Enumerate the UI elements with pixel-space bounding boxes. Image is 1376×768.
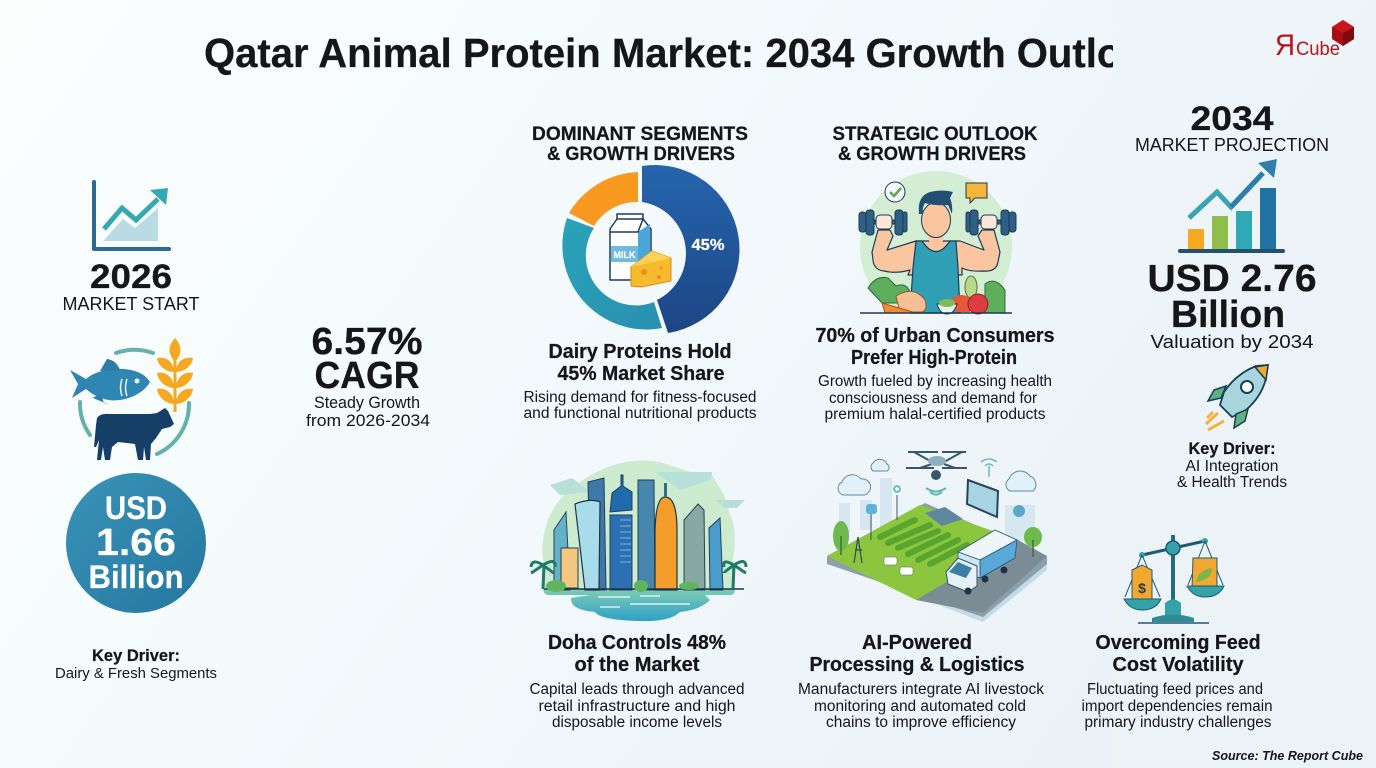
text block: urban consumers: premium halal-certified products xyxy=(824,406,1046,423)
panel: 2034 market projection xyxy=(1135,100,1329,491)
panel: 2026 market start xyxy=(55,182,217,682)
stat: USD 2.76 Billion: Valuation by 2034 xyxy=(1150,331,1314,352)
icon: rising bars xyxy=(1178,159,1285,253)
text block: urban consumers: consciousness and demand for xyxy=(829,390,1037,407)
heading: strategic outlook: & GROWTH DRIVERS xyxy=(838,144,1026,165)
text block: feed cost xyxy=(1082,632,1272,731)
text block: feed cost: primary industry challenges xyxy=(1084,714,1272,731)
panel: CAGR: 6.57% xyxy=(312,321,422,363)
icon: milk carton and cheese: MILK xyxy=(614,250,636,260)
text block: AI processing: chains to improve efficiency xyxy=(826,714,1016,731)
source note: Source: The Report Cube xyxy=(1212,749,1363,763)
text block: AI processing: AI-Powered xyxy=(862,632,972,654)
key driver: AI and health xyxy=(1177,440,1287,491)
year 2034: 2034 xyxy=(1190,100,1274,138)
text block: AI processing xyxy=(798,632,1044,731)
key driver: dairy and fresh xyxy=(55,647,217,682)
text block: dairy proteins: and functional nutritional products xyxy=(524,405,757,422)
text block: Doha xyxy=(530,632,744,731)
logo: RCube: Cube xyxy=(1296,39,1340,60)
stat: USD 2.76 Billion xyxy=(1148,258,1316,352)
text block: dairy proteins: 45% Market Share xyxy=(558,363,724,385)
heading: strategic outlook xyxy=(832,124,1038,165)
heading: dominant segments xyxy=(532,124,748,165)
text block: Doha: disposable income levels xyxy=(552,714,722,731)
text block: urban consumers: Prefer High-Protein xyxy=(851,347,1017,369)
heading: dominant segments: & GROWTH DRIVERS xyxy=(547,144,735,165)
logo: RCube xyxy=(1275,20,1354,62)
text block: Doha: of the Market xyxy=(574,654,700,676)
text block: urban consumers: 70% of Urban Consumers xyxy=(816,325,1054,347)
key driver: dairy and fresh: Key Driver: xyxy=(92,647,180,665)
stat circle: USD 1.66 Billion xyxy=(66,473,206,613)
heading: strategic outlook: STRATEGIC OUTLOOK xyxy=(832,124,1038,145)
text block: feed cost: Fluctuating feed prices and xyxy=(1087,681,1263,698)
stat: USD 2.76 Billion: Billion xyxy=(1171,294,1285,336)
text block: urban consumers xyxy=(816,325,1054,423)
panel: CAGR: CAGR xyxy=(314,355,420,397)
icon: balance scale: $ xyxy=(1138,580,1146,596)
key driver: AI and health: Key Driver: xyxy=(1188,440,1276,458)
donut chart: 45 percent dairy: 45% xyxy=(692,237,724,254)
panel: CAGR: from 2026-2034 xyxy=(306,412,430,430)
heading: dominant segments: DOMINANT SEGMENTS xyxy=(532,124,748,145)
panel: CAGR xyxy=(306,321,430,430)
logo: RCube: Я xyxy=(1275,29,1295,62)
title: Qatar Animal Protein Market: 2034 Growth Outlook xyxy=(204,30,1168,76)
text block: urban consumers: Growth fueled by increasing health xyxy=(818,373,1052,390)
year 2026: 2026 xyxy=(90,258,172,296)
stat circle: USD 1.66 Billion: USD xyxy=(105,490,167,526)
text block: dairy proteins: Rising demand for fitness-focused xyxy=(524,389,756,406)
text block: Doha: Doha Controls 48% xyxy=(548,632,726,654)
icon: athlete with dumbbells and vegetables xyxy=(859,171,1016,323)
panel: CAGR: Steady Growth xyxy=(314,394,420,412)
text block: feed cost: Cost Volatility xyxy=(1112,654,1244,676)
label: market start: MARKET START xyxy=(62,293,200,314)
stat circle: USD 1.66 Billion: Billion xyxy=(88,559,184,595)
key driver: AI and health: AI Integration xyxy=(1186,458,1278,475)
text block: Doha: retail infrastructure and high xyxy=(538,698,736,715)
text block: feed cost: Overcoming Feed xyxy=(1096,632,1260,654)
label: market projection: MARKET PROJECTION xyxy=(1135,134,1329,155)
text block: dairy proteins xyxy=(524,341,757,422)
key driver: dairy and fresh: Dairy & Fresh Segments xyxy=(55,665,217,682)
icon: balance scale xyxy=(1124,535,1224,623)
icon: smart farm with drone and truck xyxy=(827,452,1047,622)
text block: dairy proteins: Dairy Proteins Hold xyxy=(548,341,732,363)
text block: Doha: Capital leads through advanced xyxy=(530,681,744,698)
stat: USD 2.76 Billion: USD 2.76 xyxy=(1148,258,1316,300)
icon: rocket xyxy=(1206,365,1268,430)
donut chart: 45 percent dairy xyxy=(562,165,740,333)
icon: Doha skyline xyxy=(531,460,746,621)
key driver: AI and health: & Health Trends xyxy=(1177,474,1287,491)
text block: feed cost: import dependencies remain xyxy=(1082,698,1272,715)
text block: AI processing: Manufacturers integrate AI livestock xyxy=(798,681,1044,698)
icon: growth chart xyxy=(94,182,169,249)
text block: AI processing: monitoring and automated cold xyxy=(814,698,1026,715)
icon: milk carton and cheese xyxy=(610,214,671,287)
icon: fish, wheat and cow xyxy=(70,338,193,460)
text block: AI processing: Processing & Logistics xyxy=(810,654,1024,676)
stat circle: USD 1.66 Billion: 1.66 xyxy=(96,522,176,564)
